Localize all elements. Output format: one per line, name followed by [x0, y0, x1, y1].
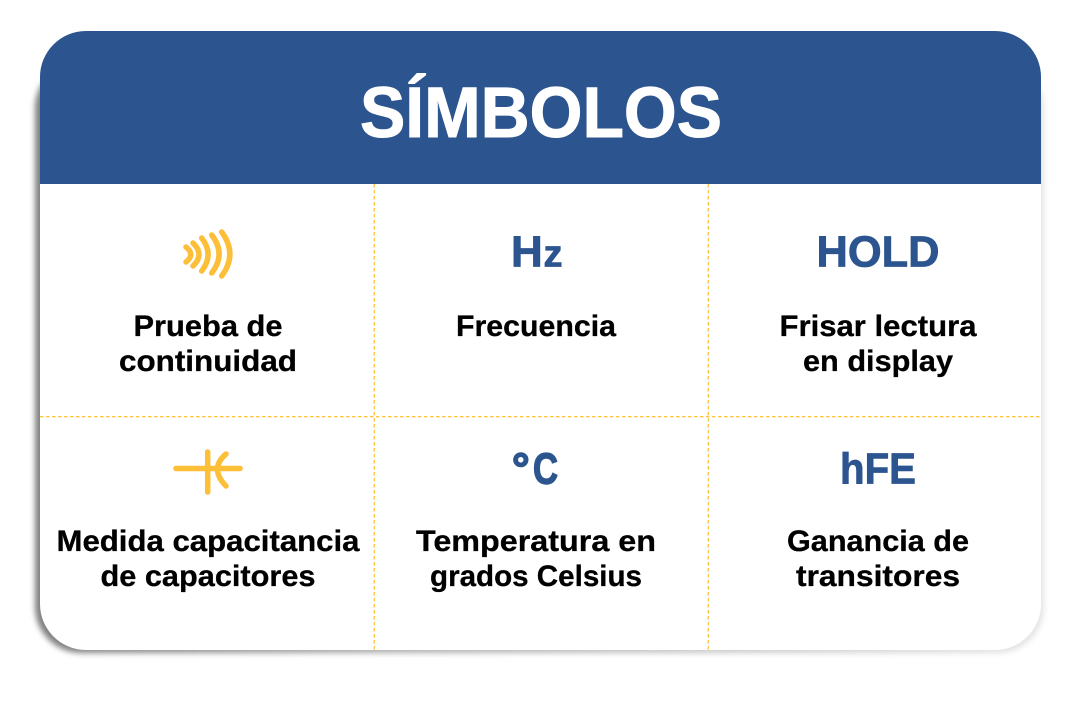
- label: temperature: [416, 525, 656, 593]
- symbol: Hz: [511, 228, 562, 276]
- label: continuity: continuidad: [119, 345, 297, 378]
- symbol: degrees Celsius: [512, 444, 558, 494]
- symbol: Hz: z: [544, 234, 562, 276]
- icon: capacitor: [176, 452, 240, 492]
- card shadow: [35, 62, 1044, 653]
- label: capacitance: Medida capacitancia: [56, 525, 360, 558]
- label: hold: Frisar lectura: [780, 310, 977, 343]
- label: transistor gain: transitores: [796, 560, 960, 593]
- label: capacitance: de capacitores: [100, 560, 316, 593]
- label: transistor gain: [787, 525, 969, 593]
- symbol: degrees Celsius: C: [533, 444, 558, 494]
- label: hold: en display: [803, 345, 953, 378]
- label: continuity: [119, 310, 297, 378]
- label: transistor gain: Ganancia de: [787, 525, 969, 558]
- icon: continuity sound waves: [186, 232, 230, 276]
- cell: frequency: [456, 228, 616, 343]
- label: continuity: Prueba de: [134, 310, 282, 343]
- cell: continuity test: [119, 232, 297, 378]
- symbol: Hz: H: [511, 228, 543, 276]
- label: temperature: Temperatura en: [416, 525, 656, 558]
- label: temperature: grados Celsius: [430, 560, 642, 593]
- label: hold: [780, 310, 977, 378]
- title: SÍMBOLOS: [360, 74, 722, 153]
- cell: transistor gain: [787, 444, 969, 593]
- symbol: hFE: hFE: [840, 444, 916, 494]
- cell: hold: [780, 228, 977, 378]
- label: capacitance: [56, 525, 360, 593]
- header band: [40, 31, 1041, 184]
- cell: capacitance: [56, 452, 360, 593]
- cell: temperature: [416, 444, 656, 593]
- symbol: HOLD: HOLD: [816, 228, 940, 276]
- symbol: degrees Celsius: °: [512, 444, 530, 494]
- label: frequency: Frecuencia: [456, 310, 616, 343]
